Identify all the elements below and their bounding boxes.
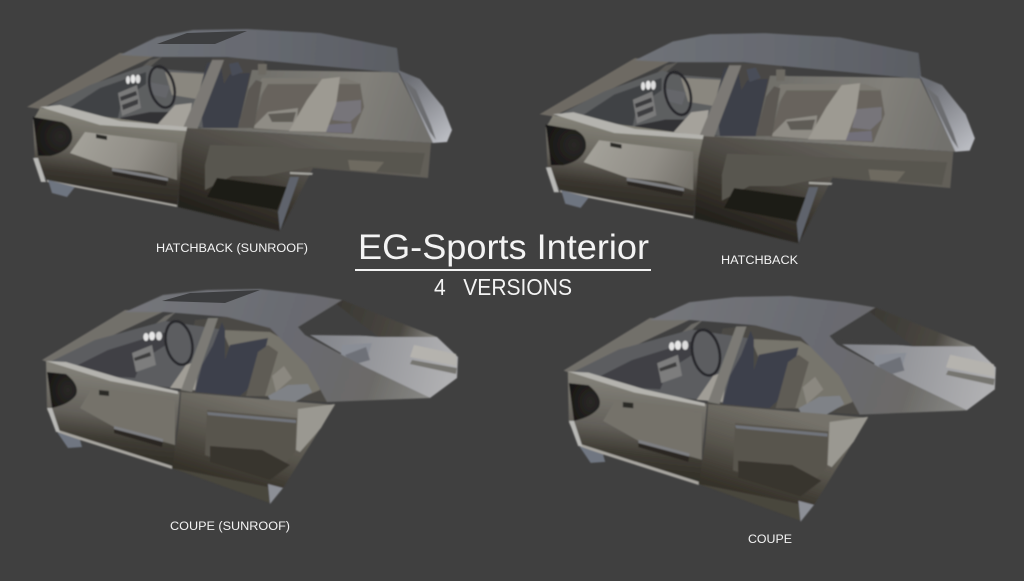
label: coupe: COUPE <box>748 532 792 546</box>
illustration: coupe with sunroof interior <box>42 289 458 504</box>
title block <box>355 228 651 300</box>
label: coupe sunroof: COUPE (SUNROOF) <box>170 519 290 533</box>
illustration: hatchback interior <box>540 33 975 243</box>
illustration: hatchback with sunroof interior <box>27 29 452 231</box>
title underline <box>355 269 651 271</box>
title: EG-Sports Interior <box>358 228 649 267</box>
subtitle: 4 VERSIONS <box>434 274 572 300</box>
label: hatchback: HATCHBACK <box>721 253 799 267</box>
sunroof opening <box>162 290 260 303</box>
sunroof opening <box>157 31 247 44</box>
illustration: coupe interior <box>564 296 996 522</box>
label: hatchback sunroof: HATCHBACK (SUNROOF) <box>156 241 308 255</box>
